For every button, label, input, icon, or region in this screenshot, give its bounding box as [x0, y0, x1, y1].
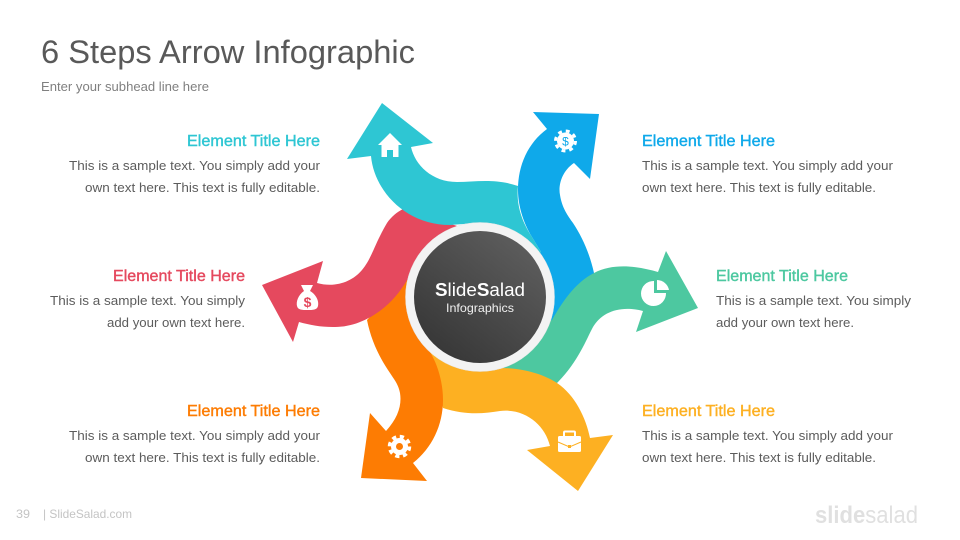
arrow: green	[500, 251, 698, 383]
text block: top right	[642, 133, 893, 195]
text block: bottom right: Element Title Here	[642, 403, 775, 420]
text block: bottom left: This is a sample text. You simply add your	[69, 429, 320, 443]
icon: money bag	[297, 285, 318, 310]
text block: middle left: Element Title Here	[113, 268, 245, 285]
text block: middle left: This is a sample text. You simply	[50, 294, 246, 308]
text block: middle right: add your own text here.	[716, 316, 854, 330]
icon: gear	[390, 436, 410, 456]
icon: gear with dollar: $	[562, 134, 569, 148]
center circle	[406, 222, 554, 372]
icon: house	[378, 133, 402, 157]
text block: top right: own text here. This text is fully editable.	[642, 181, 876, 195]
icon: gear with dollar	[556, 131, 576, 151]
text block: bottom left: Element Title Here	[187, 403, 320, 420]
arrow: teal	[347, 103, 541, 290]
text block: bottom left	[69, 403, 320, 465]
footer site: | SlideSalad.com	[43, 507, 132, 521]
subhead: Enter your subhead line here	[41, 80, 209, 94]
text block: top left: This is a sample text. You simply add your	[69, 159, 320, 173]
title: 6 Steps Arrow Infographic	[41, 34, 415, 70]
text block: top right: Element Title Here	[642, 133, 775, 150]
arrow: yellow	[430, 330, 613, 491]
text block: bottom right: own text here. This text is fully editable.	[642, 451, 876, 465]
text block: bottom right	[642, 403, 893, 465]
arrow: orange	[361, 275, 450, 481]
text block: top right: This is a sample text. You simply add your	[642, 159, 893, 173]
center logo text: SlideSalad	[435, 280, 525, 300]
text block: middle left	[50, 268, 246, 330]
text block: bottom right: This is a sample text. You simply add your	[642, 429, 893, 443]
text block: middle right: Element Title Here	[716, 268, 848, 285]
text block: middle right: This is a sample text. You simply	[716, 294, 912, 308]
text block: middle left: add your own text here.	[107, 316, 245, 330]
icon: briefcase	[558, 432, 581, 452]
text block: bottom left: own text here. This text is fully editable.	[85, 451, 320, 465]
center sub text: Infographics	[446, 301, 514, 315]
arrow: red	[262, 209, 470, 342]
text block: top left: own text here. This text is fully editable.	[85, 181, 320, 195]
text block: middle right	[716, 268, 912, 330]
text block: top left: Element Title Here	[187, 133, 320, 150]
icon: money bag: $	[304, 294, 312, 310]
text block: top left	[69, 133, 320, 195]
footer logo: slidesalad	[815, 502, 918, 529]
icon: pie chart	[641, 280, 669, 306]
arrow: blue	[500, 112, 599, 330]
footer page number: 39	[16, 507, 30, 521]
